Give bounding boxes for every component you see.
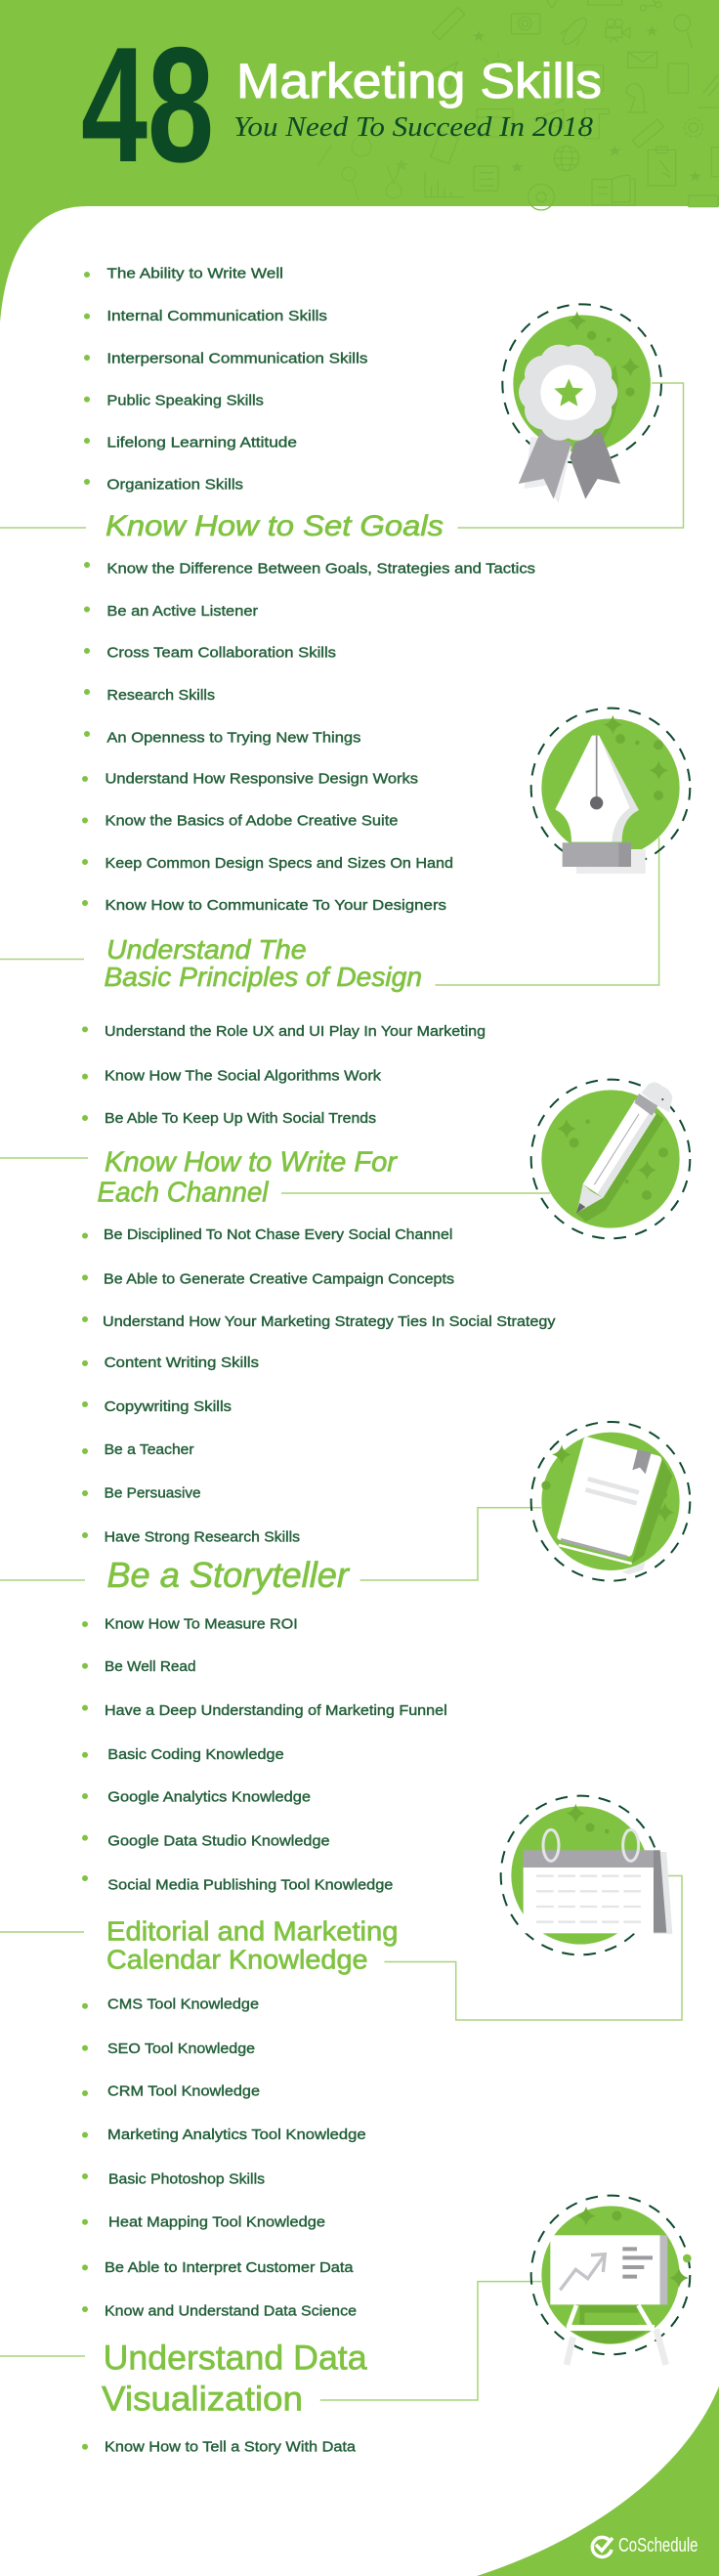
list item: CMS Tool Knowledge — [107, 1996, 259, 2013]
list item: Have Strong Research Skills — [105, 1528, 300, 1546]
list item: Know the Basics of Adobe Creative Suite — [106, 813, 399, 829]
connector line — [0, 1158, 550, 1193]
list item: Be Able To Keep Up With Social Trends — [105, 1110, 376, 1127]
panel: understand data visualization — [0, 1996, 692, 2455]
heading: Calendar Knowledge — [106, 1945, 367, 1975]
list item: Organization Skills — [106, 477, 243, 493]
heading: Understand Data — [104, 2340, 367, 2378]
list item: Understand the Role UX and UI Play In Your Marketing — [105, 1023, 486, 1040]
list item: Know the Difference Between Goals, Strategies and Tactics — [106, 561, 535, 577]
heading: Editorial and Marketing — [106, 1916, 399, 1947]
icon: pencil — [531, 1080, 690, 1238]
heading: Visualization — [102, 2380, 303, 2418]
subtitle: You Need To Succeed In 2018 — [233, 111, 594, 143]
heading: Understand The — [106, 934, 307, 965]
list item: Heat Mapping Tool Knowledge — [108, 2214, 325, 2230]
list item: CRM Tool Knowledge — [107, 2083, 260, 2099]
heading — [104, 934, 422, 992]
background icon pattern — [425, 0, 719, 210]
icon: award ribbon — [502, 304, 661, 503]
list item: Be Disciplined To Not Chase Every Social Channel — [104, 1226, 452, 1243]
heading: Know How to Write For — [105, 1147, 398, 1179]
list item: Content Writing Skills — [105, 1354, 259, 1371]
list item: Know How To Measure ROI — [105, 1616, 298, 1632]
heading — [102, 2340, 367, 2418]
list item: Google Analytics Knowledge — [107, 1788, 311, 1806]
list item: Be Able to Generate Creative Campaign Concepts — [104, 1270, 454, 1287]
panel: editorial and marketing calendar knowledge — [0, 1616, 682, 2020]
faint pattern, left of header — [317, 137, 408, 200]
list item: Lifelong Learning Attitude — [106, 434, 297, 451]
heading — [106, 1916, 399, 1975]
list item: Have a Deep Understanding of Marketing Funnel — [105, 1702, 447, 1719]
list item: Be an Active Listener — [106, 603, 258, 620]
connector line — [0, 1508, 541, 1580]
list item: Basic Coding Knowledge — [107, 1746, 284, 1763]
list item: SEO Tool Knowledge — [107, 2040, 255, 2057]
list item: An Openness to Trying New Things — [106, 729, 360, 747]
list item: Understand How Responsive Design Works — [106, 770, 418, 788]
heading: Be a Storyteller — [106, 1555, 351, 1595]
list item: Be Able to Interpret Customer Data — [105, 2259, 354, 2276]
icon: pen nib — [531, 708, 690, 874]
heading — [98, 1147, 398, 1209]
list item: Research Skills — [106, 687, 215, 704]
connector line — [0, 1876, 682, 2020]
icon: presentation board — [531, 2196, 692, 2365]
footer corner — [477, 2386, 719, 2576]
icon: coschedule logo mark — [592, 2537, 613, 2556]
list item: Marketing Analytics Tool Knowledge — [107, 2126, 366, 2143]
panel: be a storyteller — [0, 1226, 690, 1595]
title: 48: 48 — [81, 13, 214, 196]
list item: Know and Understand Data Science — [105, 2302, 357, 2320]
icon: book — [531, 1422, 690, 1581]
list item: Internal Communication Skills — [106, 308, 327, 324]
list item: Know How to Communicate To Your Designers — [106, 897, 446, 914]
connector line — [0, 837, 659, 985]
icon: calendar — [501, 1796, 672, 1954]
header band — [0, 0, 719, 322]
list item: Keep Common Design Specs and Sizes On Hand — [106, 855, 453, 872]
list item: Be Well Read — [105, 1658, 195, 1675]
list item: Know How to Tell a Story With Data — [105, 2439, 357, 2455]
panel: understand the basic principles of design — [0, 561, 690, 992]
panel: know how to write for each channel — [0, 1023, 690, 1238]
list item: The Ability to Write Well — [106, 266, 283, 281]
list item: Cross Team Collaboration Skills — [106, 645, 336, 661]
title: Marketing Skills: Marketing Skills — [236, 54, 602, 108]
list item: Interpersonal Communication Skills — [106, 350, 367, 367]
list item: Google Data Studio Knowledge — [107, 1833, 330, 1849]
list item: Understand How Your Marketing Strategy Ties In Social Strategy — [103, 1313, 556, 1330]
list item: Social Media Publishing Tool Knowledge — [107, 1876, 393, 1894]
connector line — [0, 2282, 541, 2400]
heading: Know How to Set Goals — [106, 510, 444, 542]
panel: know how to set goals — [0, 266, 684, 542]
heading: Basic Principles of Design — [104, 962, 422, 992]
list item: Be Persuasive — [105, 1485, 201, 1501]
list item: Basic Photoshop Skills — [108, 2171, 265, 2187]
list item: Know How The Social Algorithms Work — [105, 1067, 382, 1085]
heading: Each Channel — [98, 1178, 270, 1209]
list item: Copywriting Skills — [105, 1398, 232, 1415]
list item: Public Speaking Skills — [106, 393, 264, 408]
list item: Be a Teacher — [105, 1441, 194, 1458]
connector line — [0, 383, 684, 528]
